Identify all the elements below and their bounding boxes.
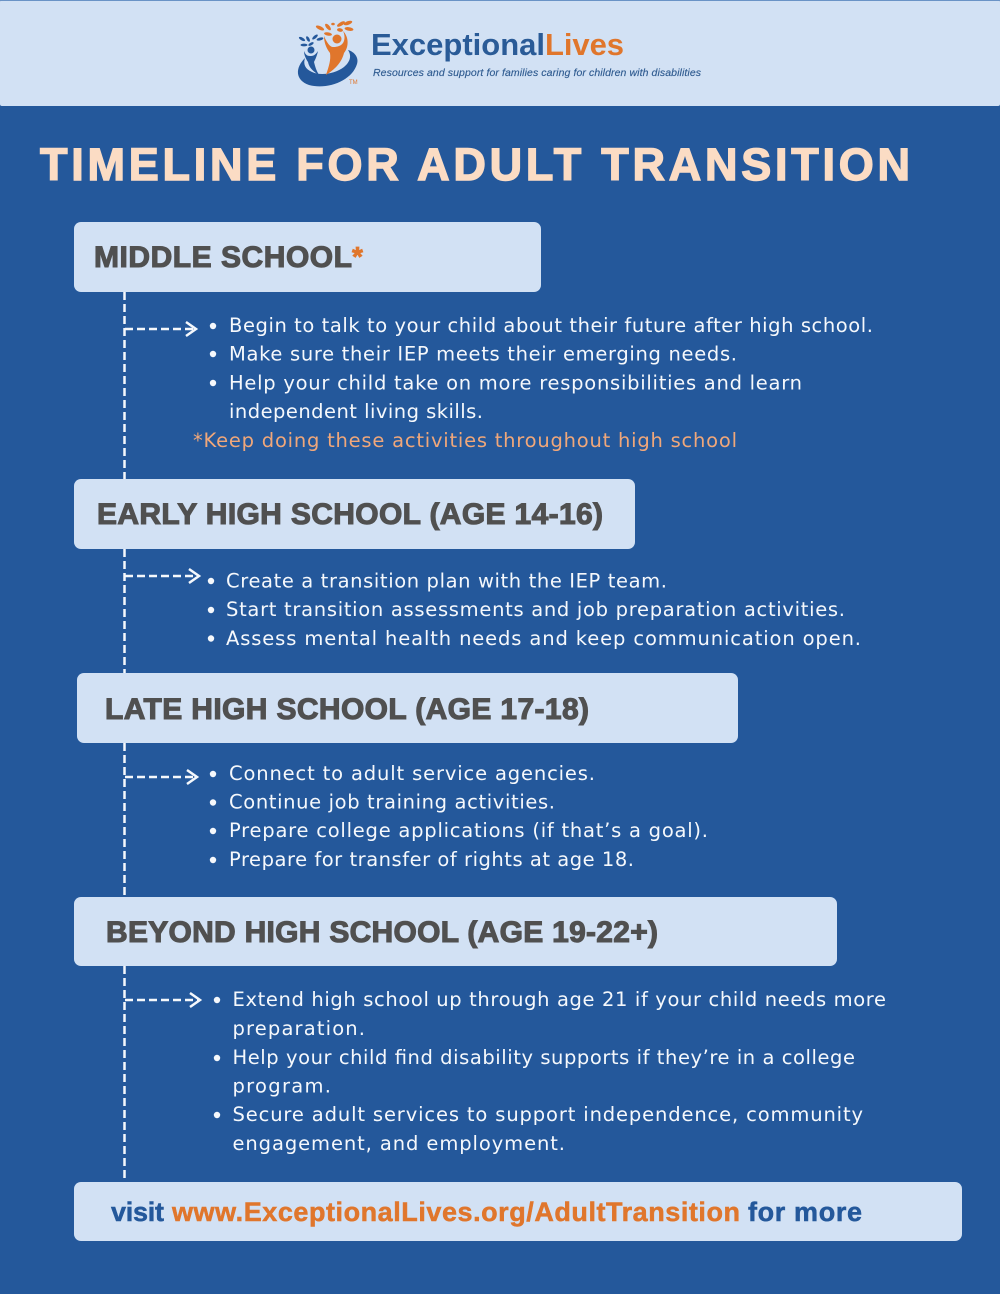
panel: late high school — [77, 673, 738, 871]
title: TIMELINE FOR ADULT TRANSITION — [40, 139, 910, 190]
icon: Exceptional Lives logo: TM — [349, 80, 358, 86]
bullet list: early high school: Start transition assessments and job preparation activities. — [226, 598, 845, 621]
call to action bar: visit — [111, 1197, 164, 1227]
logo wordmark: Lives — [545, 27, 624, 62]
logo tagline: Resources and support for families caring for children with disabilities — [373, 67, 702, 79]
heading: early high school — [74, 479, 635, 549]
bullet list: early high school: Create a transition plan with the IEP team. — [226, 570, 667, 592]
bullet list: beyond high school: Secure adult services to support independence, community — [232, 1103, 863, 1126]
heading: beyond high school — [74, 897, 837, 966]
call to action bar: www.ExceptionalLives.org/AdultTransition — [171, 1197, 740, 1227]
bullet list: early high school — [208, 570, 861, 650]
bullet list: middle school — [210, 314, 873, 423]
bullet list: beyond high school: engagement, and employment. — [232, 1132, 565, 1155]
heading: late high school — [77, 673, 738, 743]
bullet list: beyond high school: Extend high school up through age 21 if your child needs more — [232, 988, 886, 1011]
bullet list: late high school: Continue job training activities. — [229, 790, 555, 814]
arrow: middle school — [125, 322, 196, 336]
logo wordmark — [371, 27, 624, 62]
heading: middle school: * — [352, 241, 363, 272]
footnote: *Keep doing these activities throughout high school — [193, 429, 737, 452]
heading: middle school — [74, 222, 541, 292]
bullet list: late high school — [210, 762, 708, 871]
panel: early high school — [74, 479, 861, 650]
bullet list: early high school: Assess mental health needs and keep communication open. — [226, 627, 861, 650]
panel: beyond high school — [74, 897, 886, 1155]
heading: late high school: LATE HIGH SCHOOL (AGE 17-18) — [105, 693, 589, 726]
arrow: early high school — [125, 569, 199, 583]
bullet list: middle school: Help your child take on more responsibilities and learn — [229, 372, 802, 394]
arrow: late high school — [125, 770, 197, 784]
icon: Exceptional Lives logo — [298, 20, 358, 86]
bullet list: late high school: Connect to adult service agencies. — [229, 762, 595, 785]
call to action bar — [74, 1182, 962, 1241]
panel: middle school — [74, 222, 873, 452]
bullet list: middle school: independent living skills. — [229, 400, 483, 423]
bullet list: beyond high school: preparation. — [232, 1017, 365, 1040]
header banner — [0, 0, 1000, 106]
arrow: beyond high school — [125, 993, 200, 1007]
bullet list: late high school: Prepare college applications (if that’s a goal). — [229, 819, 708, 842]
bullet list: beyond high school — [214, 988, 886, 1155]
call to action bar: for more — [748, 1197, 862, 1227]
bullet list: late high school: Prepare for transfer of rights at age 18. — [229, 848, 634, 871]
timeline connector line — [123, 292, 126, 1182]
bullet list: middle school: Begin to talk to your child about their future after high school. — [229, 314, 873, 337]
logo wordmark: Exceptional — [371, 27, 545, 62]
heading: middle school: MIDDLE SCHOOL — [94, 241, 352, 274]
bullet list: middle school: Make sure their IEP meets their emerging needs. — [229, 342, 737, 366]
heading: beyond high school: BEYOND HIGH SCHOOL (AGE 19-22+) — [106, 916, 658, 949]
bullet list: beyond high school: Help your child find disability supports if they’re in a college — [232, 1046, 855, 1069]
bullet list: beyond high school: program. — [232, 1074, 331, 1098]
heading: early high school: EARLY HIGH SCHOOL (AGE 14-16) — [97, 498, 603, 531]
